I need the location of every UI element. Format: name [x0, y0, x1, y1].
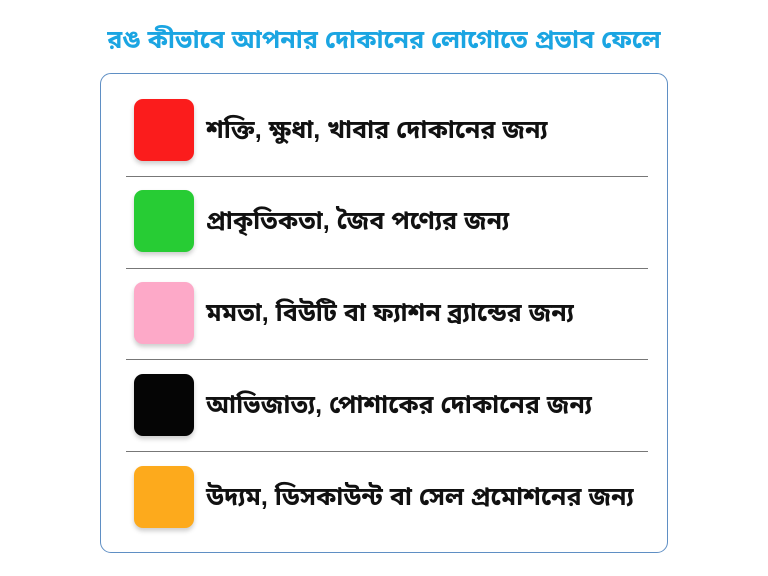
row: green [132, 190, 510, 257]
row: black: আভিজাত্য, পোশাকের দোকানের জন্য [206, 391, 592, 419]
row: red [132, 99, 548, 166]
row: orange: উদ্যম, ডিসকাউন্ট বা সেল প্রমোশনের জন্য [206, 483, 634, 511]
row: pink [132, 282, 574, 349]
panel: color list [100, 73, 668, 553]
row: orange [132, 466, 634, 533]
row: green: প্রাকৃতিকতা, জৈব পণ্যের জন্য [206, 207, 509, 235]
title: রঙ কীভাবে আপনার দোকানের লোগোতে প্রভাব ফেলে [107, 26, 661, 54]
row: pink: মমতা, বিউটি বা ফ্যাশন ব্র্যান্ডের জন্য [206, 299, 574, 327]
row: black [132, 374, 592, 441]
row: red: শক্তি, ক্ষুধা, খাবার দোকানের জন্য [206, 116, 548, 144]
